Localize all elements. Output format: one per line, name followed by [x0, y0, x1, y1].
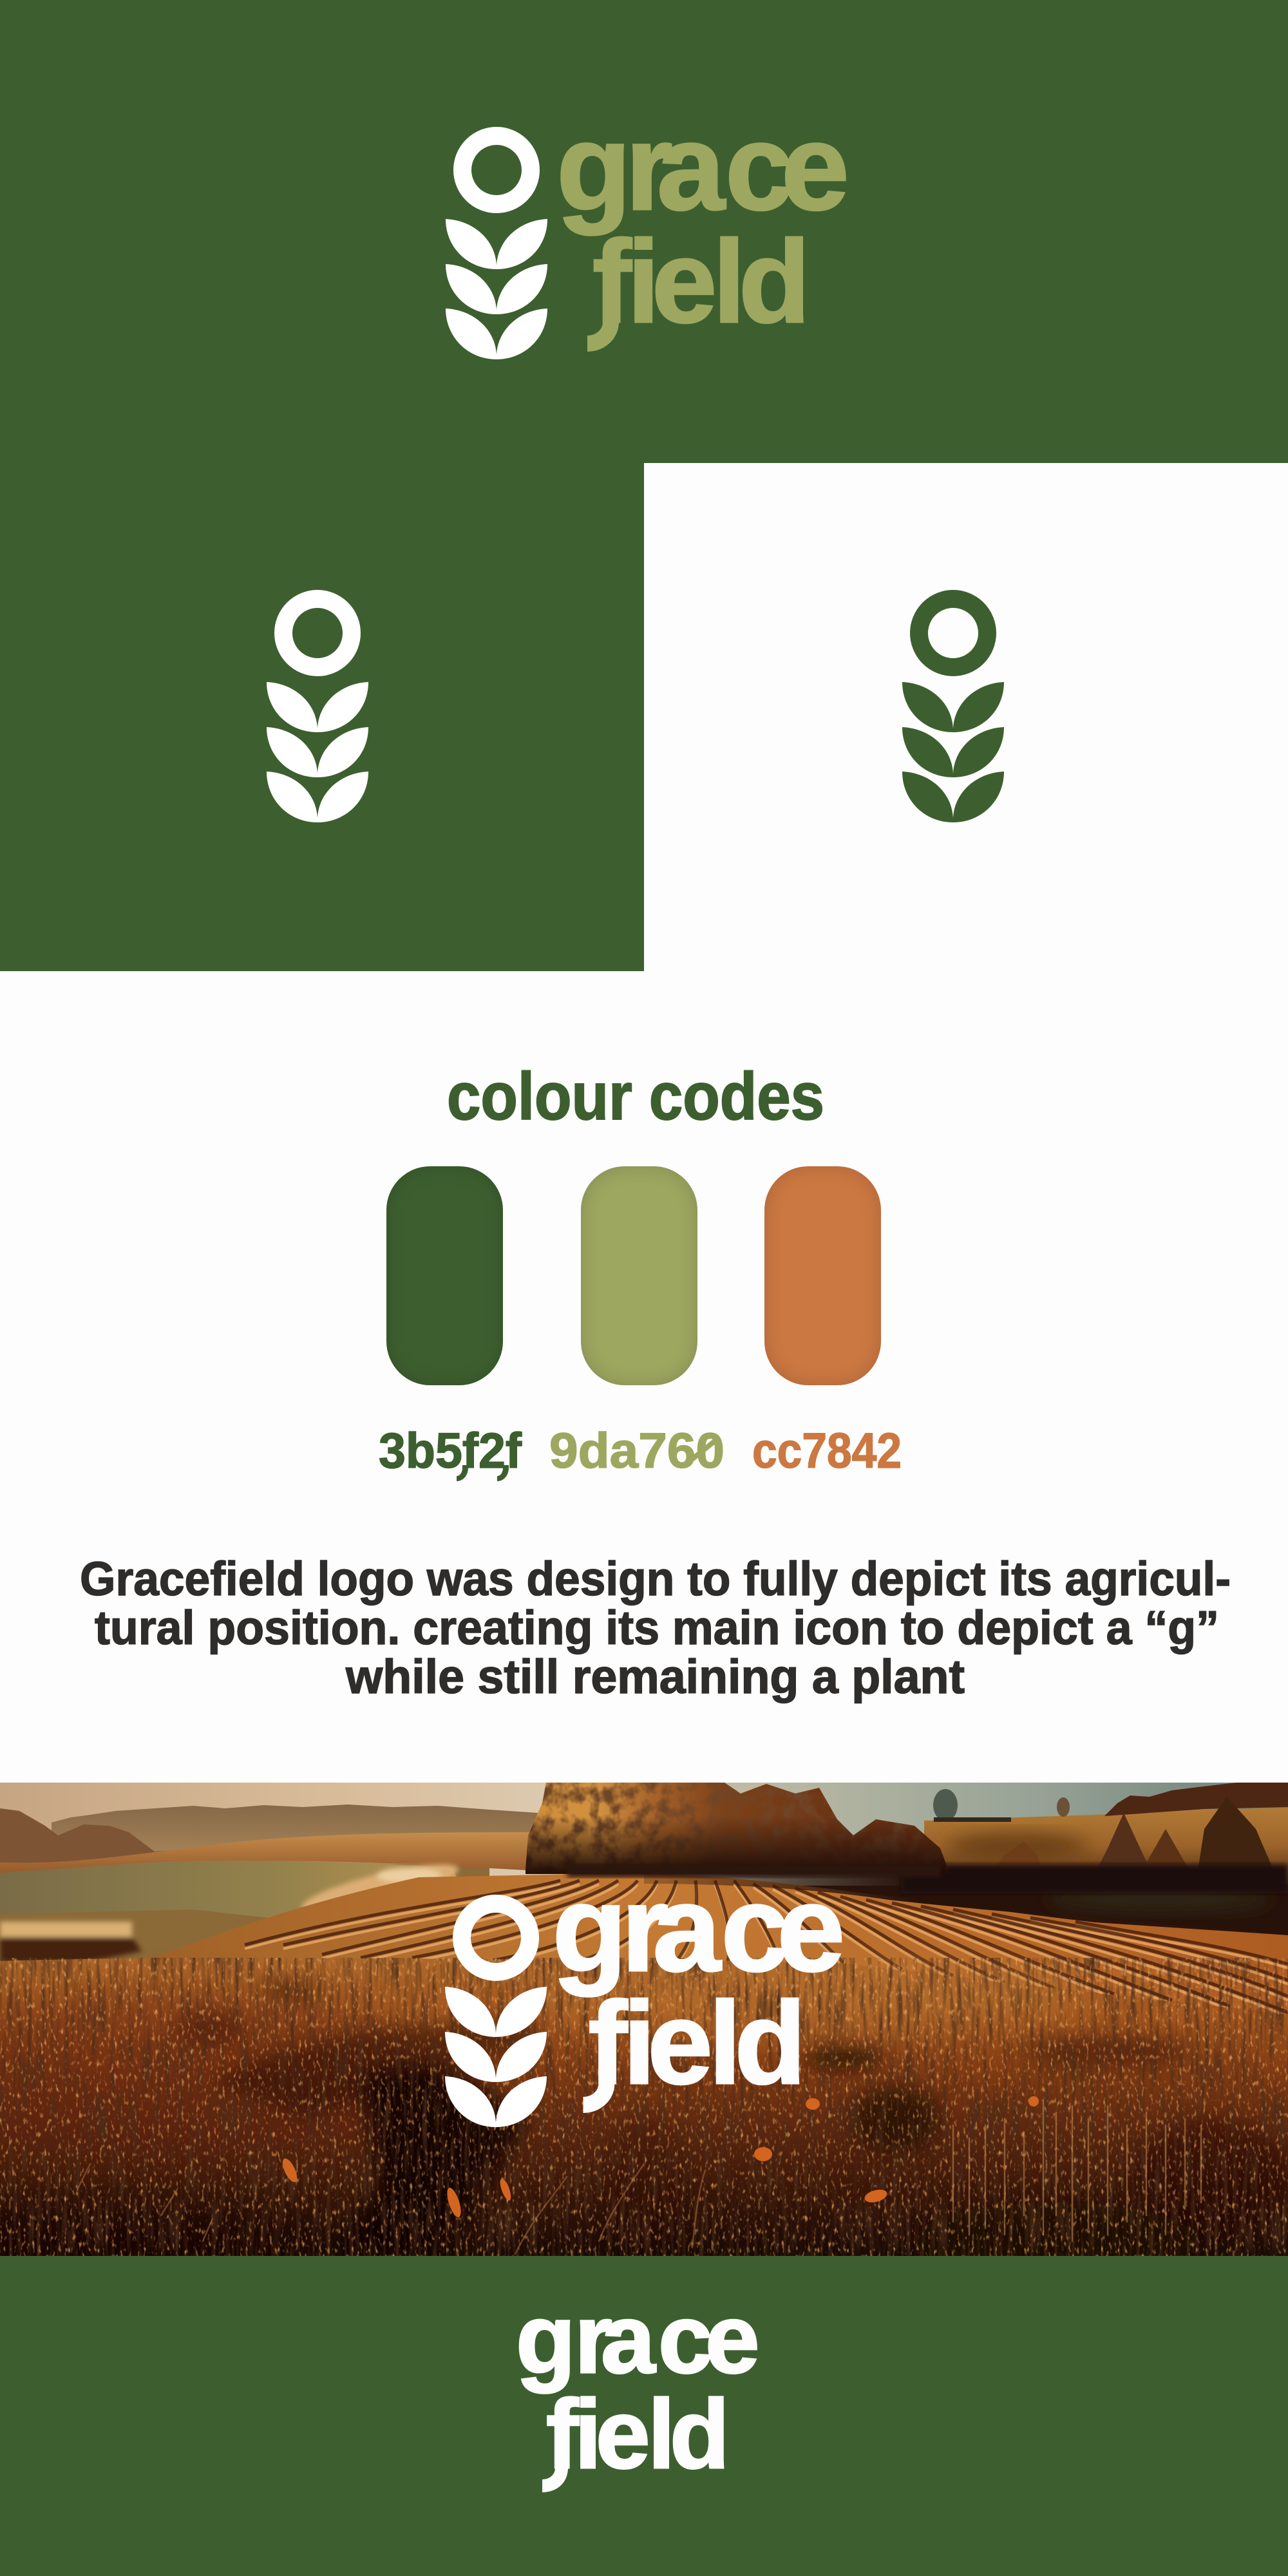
dark field patches [174, 1980, 1288, 2280]
dark track [335, 2067, 528, 2256]
dark hedge band [902, 1864, 1288, 1893]
icon: green plant mark [902, 599, 1004, 822]
mid green-tan field [0, 1861, 470, 1922]
text block: logo description: Gracefield logo was design to fully depict its agricul- [80, 1552, 1231, 1605]
code: 3b5f2f: 3b5f2f [379, 1423, 522, 1479]
wordmark: grace field [556, 99, 849, 352]
wordmark: grace field: field [592, 216, 810, 347]
icon: plant mark [446, 136, 547, 359]
swatch: dark green [386, 1166, 503, 1385]
wordmark: grace field [553, 1861, 845, 2113]
dark photo base [802, 1886, 1288, 2014]
furrow lines [245, 1880, 1288, 2016]
swatch: terracotta [764, 1166, 881, 1385]
foreground stubble field [0, 1958, 1288, 2256]
orange leaf accents [279, 2096, 1039, 2219]
dark left hill [0, 1808, 164, 1862]
tree clump: golden poplars and dark oaks [526, 1783, 951, 1874]
colour code labels [379, 1423, 902, 1481]
pale stalks and orange leaves [77, 2099, 1201, 2254]
lower tree shading [526, 1783, 951, 1874]
wordmark: grace field: grace [553, 1861, 845, 1997]
upper right shade [644, 1868, 1288, 1935]
faint diagonal shadow [213, 2016, 541, 2119]
warm lit field glow [515, 1961, 1082, 2032]
sky [0, 1783, 1288, 1886]
hillside shadow [947, 1833, 1088, 1861]
heading: colour codes: colour codes [447, 1059, 824, 1134]
text block: logo description [80, 1552, 1231, 1703]
speckled highlights [0, 1971, 1288, 2256]
distant rolling field [0, 1832, 538, 1874]
red tint on left field [0, 1990, 431, 2157]
wordmark: grace field: grace [516, 2284, 760, 2394]
code: 9da760: 9da760 [549, 1423, 724, 1479]
code: cc7842: cc7842 [752, 1423, 902, 1479]
icon: white plant mark [267, 599, 368, 822]
green shaded meadow [1056, 1893, 1257, 1919]
mottled foliage [526, 1783, 951, 1874]
left ground base [0, 1864, 489, 1961]
photo logo lockup [445, 1861, 845, 2127]
panel: top green logo banner [0, 0, 1288, 463]
dark lower left corner [0, 2209, 316, 2286]
tree base shadow [567, 1864, 940, 1877]
text block: logo description: while still remaining a plant [345, 1650, 965, 1703]
primary logo lockup [446, 99, 849, 359]
top right tree line [1104, 1783, 1288, 1816]
distant trees [933, 1789, 1070, 1822]
wordmark: grace field: field [589, 1977, 806, 2108]
wordmark: grace field: field [546, 2380, 730, 2489]
panel: green icon tile [0, 463, 644, 971]
wordmark: grace field: grace [556, 99, 849, 236]
wordmark: grace field [516, 2284, 760, 2492]
bright grass patches [0, 1861, 460, 1961]
panel: white icon tile [644, 463, 1288, 971]
swatch: olive green [581, 1166, 697, 1385]
vertical stubble texture [0, 1971, 1288, 2256]
right side trees [992, 1797, 1274, 1874]
right hillside field [924, 1808, 1288, 1884]
photo: autumn farm field with white logo [0, 1783, 1288, 2286]
panel: bottom green wordmark banner [0, 2256, 1288, 2576]
hazy far forest [52, 1804, 538, 1868]
foliage colour [526, 1783, 951, 1874]
text block: logo description: tural position. creating its main icon to depict a “g” [95, 1601, 1219, 1654]
plowed field [148, 1873, 1288, 2014]
icon: white plant mark [445, 1904, 547, 2127]
